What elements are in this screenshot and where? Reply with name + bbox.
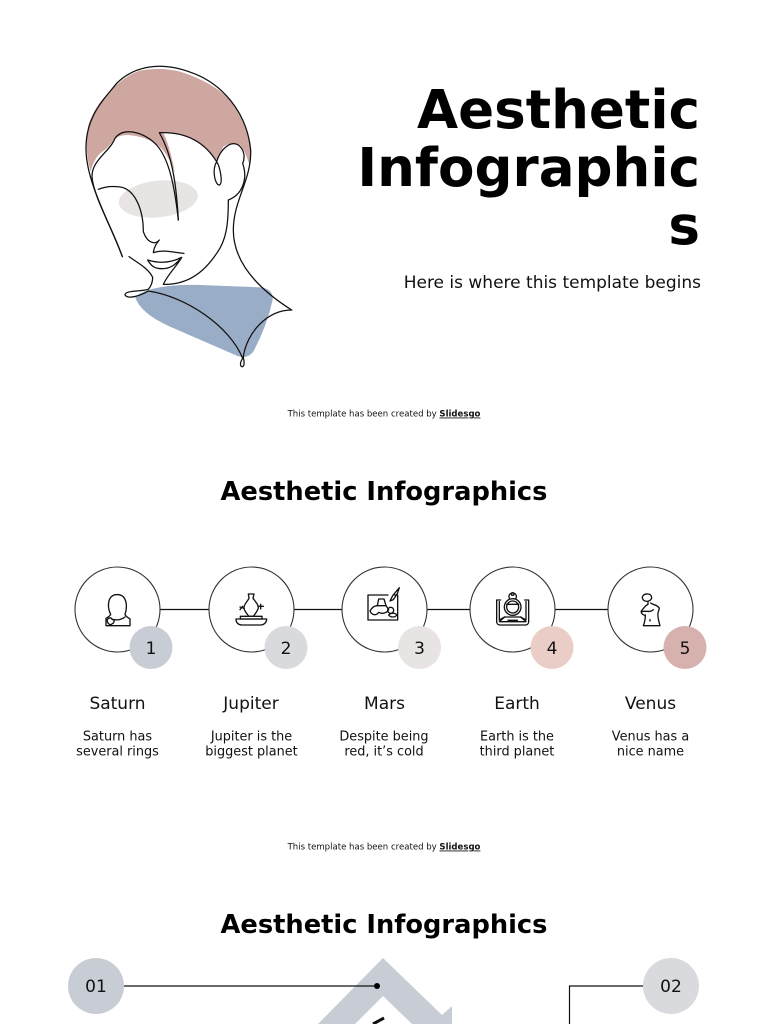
connector 02	[570, 986, 643, 1024]
step 4: Earth	[470, 567, 574, 669]
step descriptions: biggest planet	[205, 744, 298, 760]
icon: venus statue	[641, 594, 660, 626]
step labels: Mars	[364, 694, 405, 714]
step descriptions: nice name	[617, 744, 684, 760]
step descriptions: Venus has a	[612, 730, 689, 744]
marker 02	[643, 958, 699, 1014]
step descriptions: third planet	[480, 744, 554, 760]
chevron diamond	[318, 958, 452, 1024]
icon: ornate mirror	[497, 593, 529, 625]
badge 1	[130, 626, 172, 669]
step 1: Saturn	[75, 567, 172, 669]
step 1: Saturn: 1	[146, 639, 156, 659]
timeline connector	[160, 608, 608, 610]
shoulder colour shape	[135, 285, 273, 357]
main title: Infographic	[357, 137, 700, 199]
section heading 2: Aesthetic Infographics	[221, 910, 547, 940]
main title: Aesthetic	[417, 79, 700, 141]
step 5: Venus	[608, 567, 706, 669]
marker 01	[68, 958, 124, 1014]
badge 5	[664, 626, 706, 669]
step descriptions: Saturn has	[83, 730, 152, 744]
badge 3	[398, 626, 441, 669]
connector 01	[124, 983, 380, 989]
marker 01: 01	[85, 977, 107, 997]
credit line 2: This template has been created by Slidesgo	[287, 842, 481, 852]
step descriptions: several rings	[76, 744, 159, 760]
badge 2	[264, 626, 308, 669]
icon: vase on tray	[236, 594, 267, 625]
step descriptions: red, it’s cold	[344, 744, 424, 760]
step descriptions: Jupiter is the	[210, 730, 292, 744]
step 4: Earth: 4	[547, 639, 557, 659]
step 3: Mars	[342, 567, 441, 669]
main title: s	[668, 195, 700, 257]
step labels: Earth	[494, 694, 540, 714]
section heading 1: Aesthetic Infographics	[221, 477, 547, 507]
step descriptions: Earth is the	[480, 730, 554, 744]
step 5: Venus: 5	[680, 639, 690, 659]
icon: bust portrait	[106, 595, 130, 626]
credit line 1: This template has been created by Slidesgo	[287, 410, 481, 420]
main title	[357, 79, 700, 257]
step 2: Jupiter: 2	[281, 639, 291, 659]
step descriptions: Despite being	[339, 730, 429, 744]
hair colour shape	[87, 69, 251, 173]
step 2: Jupiter	[209, 567, 308, 669]
step labels: Jupiter	[222, 694, 279, 714]
step labels: Venus	[625, 694, 676, 714]
step labels	[89, 694, 676, 714]
step labels: Saturn	[89, 694, 146, 714]
icon: still life painting	[368, 588, 399, 620]
marker 02: 02	[660, 977, 682, 997]
cheek colour shape	[117, 177, 200, 221]
step descriptions	[76, 730, 689, 760]
step 3: Mars: 3	[414, 639, 425, 659]
badge 4	[530, 626, 574, 669]
illustration: line art face	[86, 66, 292, 367]
subtitle: Here is where this template begins	[404, 273, 701, 293]
icon fragment in diamond	[373, 1018, 384, 1024]
face contour lines	[86, 66, 292, 367]
